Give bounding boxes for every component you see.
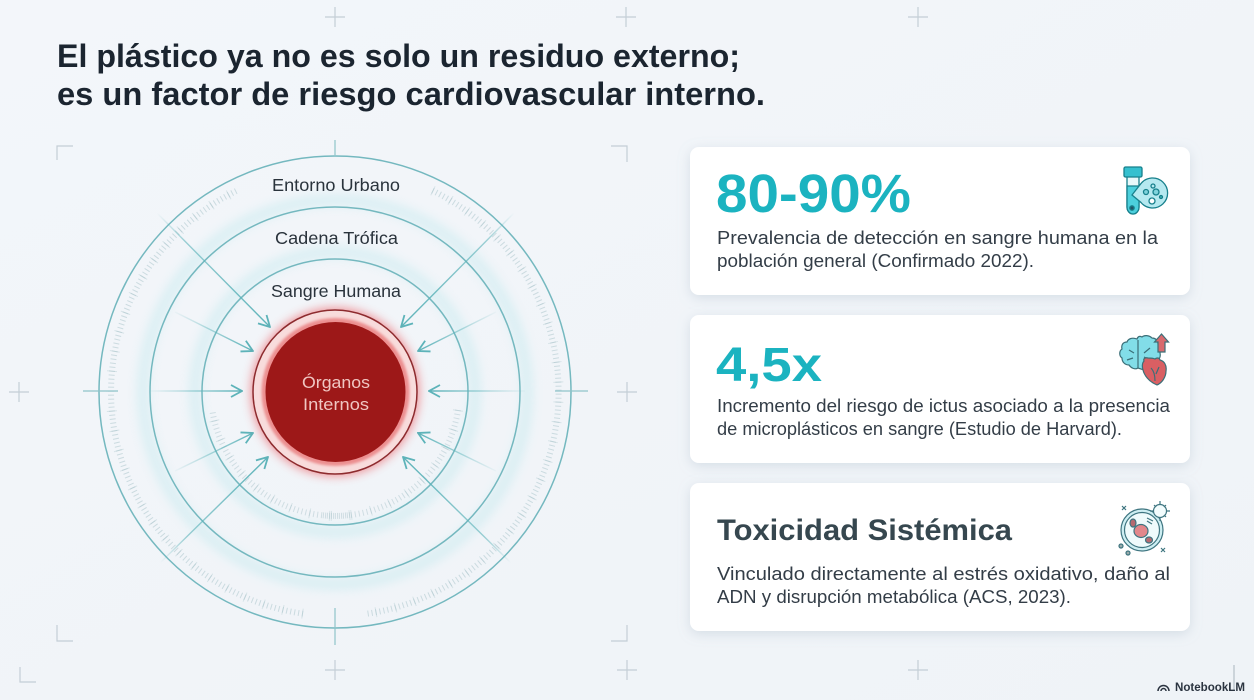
- card: 80-90%: 80-90%: [716, 164, 911, 224]
- card: Toxicidad Sistémica: Toxicidad Sistémica: [717, 514, 1012, 547]
- core: internal organs: Órganos: [302, 373, 370, 392]
- card: 4,5x: [690, 315, 1190, 463]
- title: [57, 38, 765, 112]
- title: El plástico ya no es solo un residuo externo;: [57, 38, 740, 74]
- title: es un factor de riesgo cardiovascular interno.: [57, 76, 765, 112]
- card: 80-90%: Prevalencia de detección en sangre humana en la: [717, 228, 1159, 248]
- card: 80-90%: población general (Confirmado 2022).: [717, 251, 1034, 271]
- ring labels: Sangre Humana: [271, 281, 401, 301]
- ring labels: [271, 175, 401, 301]
- card: 4,5x: de microplásticos en sangre (Estudio de Harvard).: [717, 419, 1122, 439]
- core: internal organs: Internos: [303, 395, 369, 414]
- card: 4,5x: 4,5x: [716, 339, 822, 392]
- icon: test tube with microplastics: [1124, 167, 1168, 214]
- card: Toxicidad Sistémica: ADN y disrupción metabólica (ACS, 2023).: [717, 587, 1071, 607]
- ring labels: Cadena Trófica: [275, 228, 398, 248]
- card: 80-90%: [690, 147, 1190, 295]
- card: 4,5x: Incremento del riesgo de ictus asociado a la presencia: [717, 396, 1171, 416]
- arrows pointing inward: [150, 213, 525, 563]
- watermark: NotebookLM: NotebookLM: [1175, 682, 1245, 694]
- card: Toxicidad Sistémica: [690, 483, 1190, 631]
- icon: damaged cell: [1119, 501, 1170, 555]
- core: internal organs: [251, 308, 419, 476]
- card: Toxicidad Sistémica: Vinculado directamente al estrés oxidativo, daño al: [717, 564, 1170, 584]
- concentric exposure diagram: [83, 140, 588, 645]
- ring labels: Entorno Urbano: [272, 175, 400, 195]
- icon: brain and heart with up arrow: [1120, 334, 1168, 385]
